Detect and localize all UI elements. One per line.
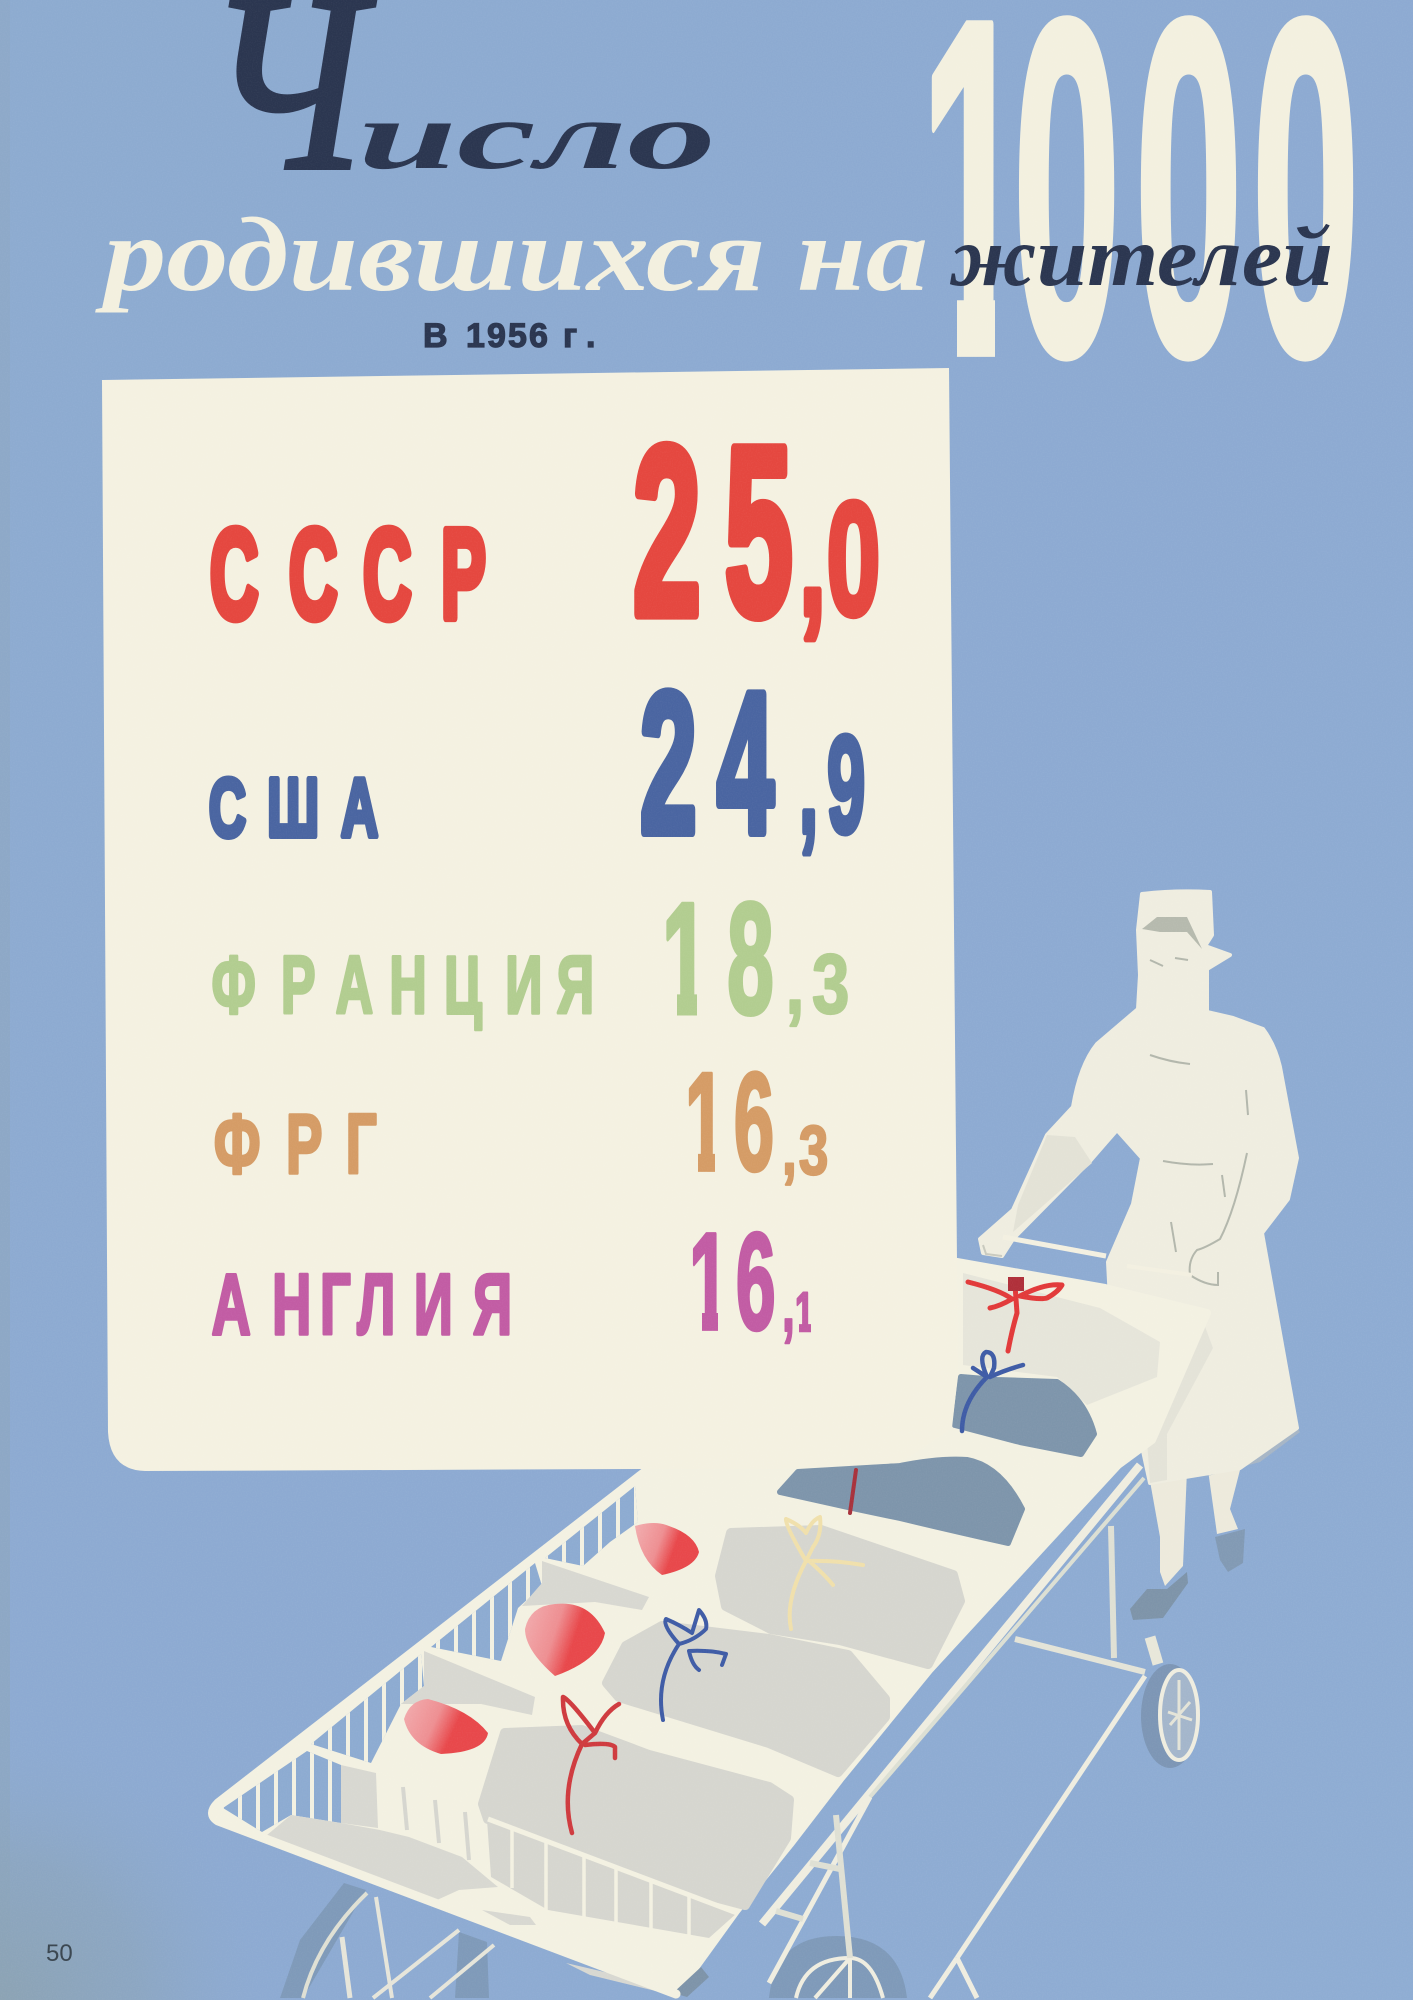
- value 24,9: ,9: [799, 708, 865, 862]
- subtitle: родившихся на: родившихся на: [95, 196, 928, 313]
- basket rim: [212, 1468, 676, 1994]
- numeral 1000: [932, 15, 1354, 362]
- title: Число: [205, 0, 716, 224]
- row: США: [209, 651, 865, 875]
- dark blankets: [780, 1377, 1094, 1543]
- rear wheel: [1141, 1664, 1199, 1768]
- grey floor and folds: [267, 1273, 1160, 1994]
- left wheel: [280, 1883, 494, 1998]
- tubes and legs: [762, 1465, 1158, 1998]
- row: ФРГ: [214, 1070, 828, 1186]
- row: Англия: [212, 1230, 811, 1344]
- value 16,1: [692, 1230, 811, 1344]
- label ФРАНЦИЯ: ФРАНЦИЯ: [212, 939, 594, 1031]
- value 16,1: 16: [689, 1205, 776, 1359]
- illustration: cart basket: [212, 1262, 1207, 1997]
- value 16,3: 16: [685, 1043, 774, 1200]
- centre wheel: [769, 1936, 907, 1998]
- illustration: cart frame: [280, 1465, 1199, 1998]
- row: СССР: [210, 399, 880, 666]
- nurse shading: [983, 917, 1248, 1483]
- value 18,3: [666, 900, 848, 1028]
- front wires: [403, 1787, 737, 1997]
- label АНГЛИЯ: АНГЛИЯ: [212, 1257, 512, 1353]
- label ФРГ: ФРГ: [214, 1098, 377, 1192]
- nurse legs and shoes: [1130, 1428, 1300, 1620]
- value 18,3: 18: [662, 871, 774, 1047]
- title: Число: исло: [358, 82, 716, 189]
- year label: В 1956 г.: [423, 317, 595, 355]
- nurse body and arms: [980, 891, 1297, 1483]
- subtitle: жителей: жителей: [949, 210, 1333, 304]
- value 16,1: ,1: [782, 1258, 814, 1348]
- wire side panes: [220, 1486, 650, 1832]
- row: Франция: [212, 900, 848, 1032]
- blankets: [483, 1530, 960, 1905]
- illustration: nurse: [980, 891, 1300, 1620]
- value 16,3: ,3: [782, 1112, 828, 1190]
- value 24,9: 24: [640, 651, 774, 875]
- basket body: [213, 1262, 1207, 1994]
- panel: statistics card: [102, 368, 958, 1471]
- value 24,9: [640, 651, 865, 875]
- value 25,0: [633, 399, 880, 666]
- value 16,3: [688, 1070, 828, 1186]
- label СССР: СССР: [210, 503, 486, 645]
- baby bonnets: [404, 1523, 699, 1754]
- ribbons: [563, 1277, 1062, 1833]
- value 25,0: 25: [633, 399, 793, 666]
- value 18,3: ,3: [786, 938, 849, 1032]
- value 25,0: ,0: [799, 470, 880, 648]
- cart handle: [1003, 1237, 1192, 1275]
- page number: 50: [46, 1940, 73, 1967]
- label США: США: [209, 760, 378, 854]
